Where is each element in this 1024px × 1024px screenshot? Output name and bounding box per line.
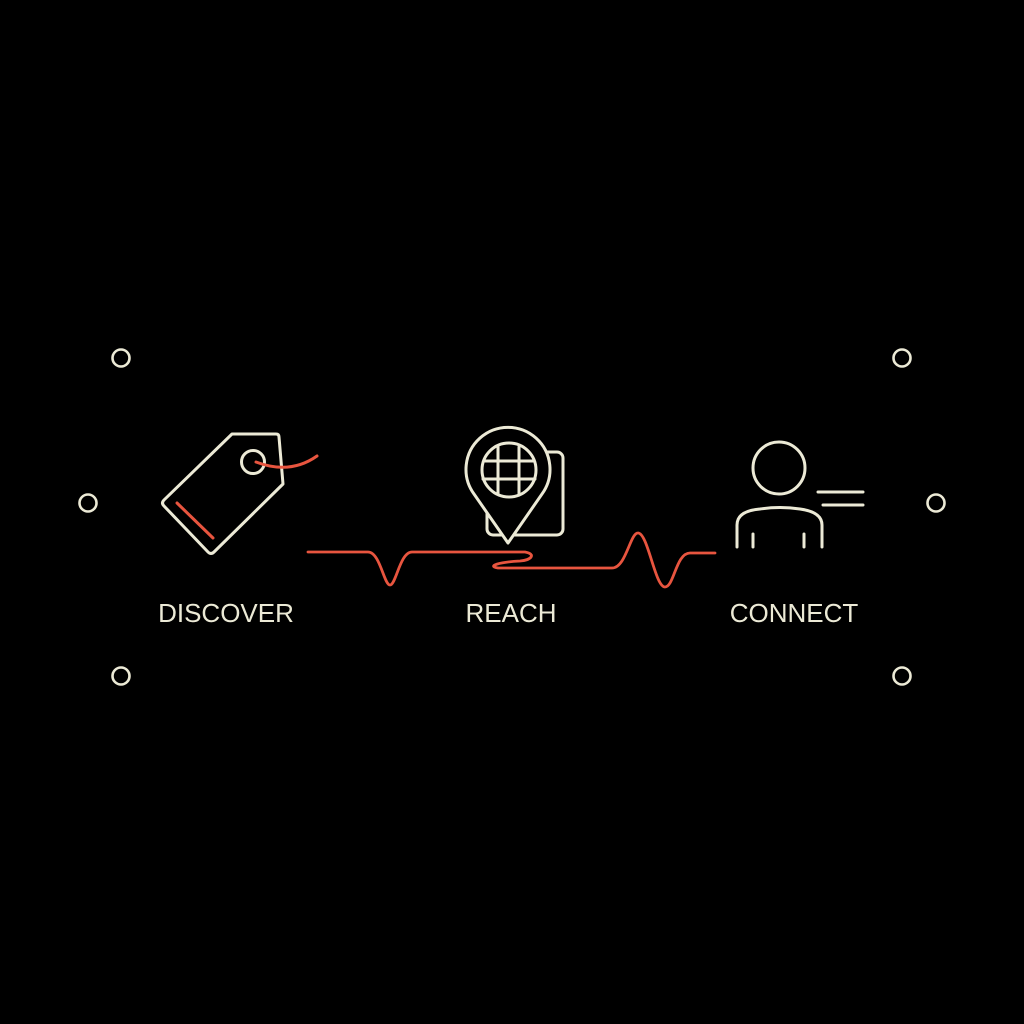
icon: person [737,442,863,547]
label: CONNECT: CONNECT [730,598,858,628]
connector wave line [308,533,715,587]
label: REACH: REACH [465,598,557,628]
decorative dots [80,350,944,684]
icon: location pin with globe [466,427,563,543]
label: DISCOVER: DISCOVER [158,598,294,628]
icon: price tag [162,434,317,554]
